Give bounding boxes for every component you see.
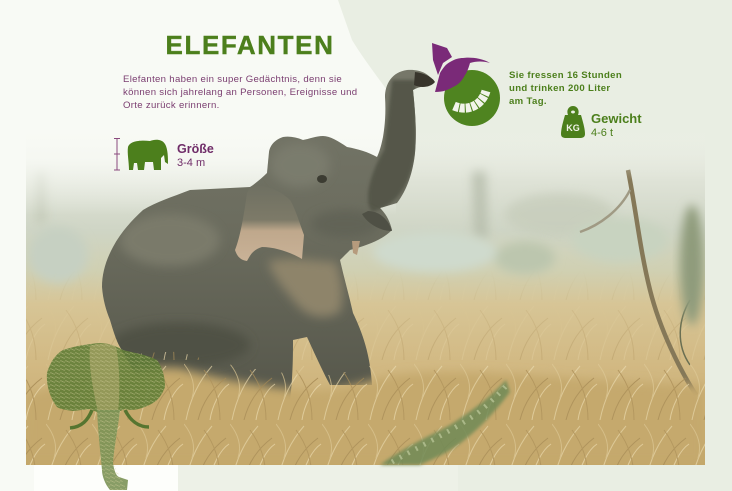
- size label: Größe: [177, 142, 214, 156]
- food text: Sie fressen 16 Stunden: [509, 70, 622, 81]
- elephant ear: [235, 186, 304, 261]
- sketch forehead highlight: [90, 343, 119, 412]
- icon: purple leaves: [432, 43, 490, 92]
- icon: elephant silhouette: [128, 140, 168, 170]
- title: ELEFANTEN: [166, 30, 334, 60]
- sketch trunk: [97, 410, 128, 490]
- misty tree silhouettes: [36, 170, 615, 240]
- weight label: Gewicht: [591, 111, 642, 126]
- trunk shade: [368, 80, 416, 212]
- elephant tusk: [352, 241, 360, 255]
- grass strands: [26, 352, 705, 465]
- grass base: [26, 368, 705, 465]
- tree at right: [580, 170, 704, 395]
- icon: kg weight: [561, 106, 585, 138]
- fade of the photo top into the page: [26, 130, 705, 215]
- dark lower body: [114, 322, 248, 364]
- elephant eye: [317, 175, 327, 183]
- sketch hatch: [47, 343, 165, 490]
- sketched elephant head: [47, 343, 165, 490]
- weight block: [561, 106, 642, 139]
- weight icon text: KG: [566, 123, 580, 133]
- elephant body and trunk: [102, 70, 430, 396]
- sketch tusks: [70, 410, 149, 428]
- intro text: Elefanten haben ein super Gedächtnis, denn sie: [123, 74, 342, 85]
- intro text: können sich jahrelang an Personen, Ereignisse und: [123, 87, 357, 98]
- pale foliage clusters: [28, 218, 668, 283]
- icon: grub: [454, 91, 486, 108]
- sketch ears and forehead: [47, 343, 165, 412]
- photo: misty grassland background: [26, 130, 705, 465]
- tan chest: [268, 259, 343, 317]
- weight value: 4-6 t: [591, 127, 613, 139]
- elephant mouth: [362, 211, 392, 231]
- foreground grass: [26, 352, 705, 465]
- trunk tip: [414, 72, 435, 87]
- body highlights: [120, 214, 220, 266]
- head jaw: [318, 212, 372, 232]
- golden grass back layer: [26, 300, 705, 465]
- food icon: [432, 43, 500, 126]
- icon: height scale: [114, 138, 120, 170]
- icon: green circle: [444, 70, 500, 126]
- intro text: Orte zurück erinnern.: [123, 100, 220, 111]
- green leafy branch in grass: [380, 380, 510, 465]
- size value: 3-4 m: [177, 157, 205, 169]
- size block: [114, 138, 214, 170]
- food text: und trinken 200 Liter: [509, 83, 610, 94]
- elephant photo: [95, 60, 440, 405]
- food text: am Tag.: [509, 96, 547, 107]
